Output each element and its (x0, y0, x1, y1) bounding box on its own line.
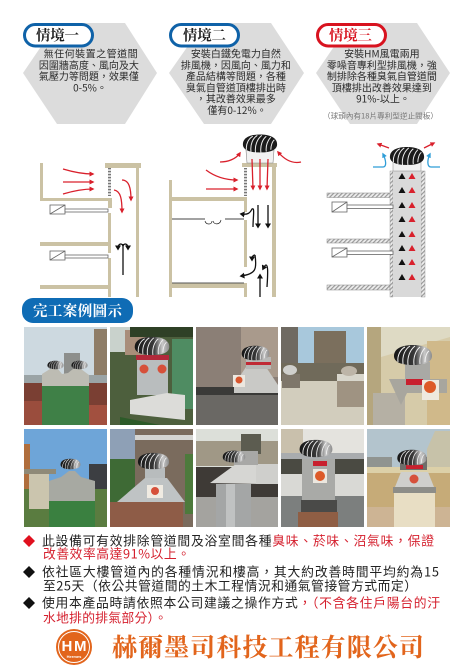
note two (23, 562, 439, 594)
logo: HM badge (56, 629, 92, 665)
shaft left wall (390, 171, 393, 297)
louver screen (244, 168, 247, 196)
description text one: 0-5%。 (73, 80, 107, 94)
ventilator head (243, 134, 277, 152)
ceiling line with fan (172, 218, 244, 220)
panel: scenario three (316, 23, 450, 124)
note two text: 依社區大樓管道內的各種情況和樓高，其大約改善時間平均約為15 (42, 562, 439, 580)
description text one: 因圍牆高度、風向及大 (39, 57, 139, 72)
description text three: 安裝HM風電兩用 (344, 46, 420, 60)
description text two: 臭氣自管道頂樓排出時 (186, 80, 286, 94)
photo: green box under blue sky (24, 429, 107, 527)
description text two: 產品結構等問題，各種 (186, 68, 286, 83)
photo: rooftop with two ventilators (281, 327, 364, 425)
bullet: red diamond (23, 535, 35, 547)
photo: white hopper and pedestal on rooftop (196, 429, 278, 527)
description text two: ，其改善效果最多 (196, 90, 276, 106)
note one (23, 530, 434, 562)
logo: HM badge: HM (62, 638, 86, 655)
note one text: 改善效率高達91%以上。 (43, 544, 190, 562)
note three (23, 592, 440, 626)
lower floor dark line (172, 282, 244, 284)
ceiling fan mark (205, 220, 221, 224)
note three text: 使用本產品時請依照本公司建議之操作方式，（不含各住戶陽台的汙 (42, 592, 440, 612)
caption: patented check valves: （球頭內有18片專利型逆止閥板） (323, 110, 438, 122)
logo: HM badge: Hermes (67, 654, 82, 659)
exhaust fans and ducts (50, 205, 108, 260)
note two text: 至25天（依公共管道間的土木工程情況和通氣管接管方式而定） (43, 576, 417, 594)
building walls (40, 163, 141, 297)
panel: scenario two (169, 23, 304, 124)
diagram: scenario three shaft (327, 143, 440, 297)
shaft interior (393, 171, 421, 297)
diagram: scenario two shaft (169, 134, 301, 297)
hexagon background two (169, 23, 304, 124)
description text one: 無任何裝置之管道間 (44, 46, 138, 60)
company name: 赫爾墨司科技工程有限公司 (112, 634, 424, 662)
red wind and down arrows (206, 152, 301, 189)
photo: hopper ventilator by concrete wall (196, 327, 278, 425)
hexagon background one (23, 23, 157, 124)
red outflow arrows (378, 143, 434, 148)
note one text: 此設備可有效排除管道間及浴室間各種臭味、菸味、沼氣味，保證 (42, 530, 434, 550)
panel: scenario one (23, 23, 157, 124)
blue inflow arrows (373, 154, 440, 167)
bullet: black diamond (23, 566, 35, 578)
photo: ventilator on hopper with brick base (110, 429, 193, 527)
black airflow arrow (118, 244, 128, 275)
section heading: completed cases: 完工案例圖示 (33, 302, 124, 320)
black airflow arrows (241, 205, 268, 297)
photo: silver cylinder with ventilator in garden (110, 327, 193, 425)
description text two: 排風機，因風向、風力和 (181, 57, 291, 72)
red wind arrows (63, 169, 131, 212)
photo: large ventilator on wall bracket (367, 327, 450, 425)
badge: scenario two: 情境二 (183, 26, 226, 44)
description text two: 安裝白鐵免電力自然 (191, 46, 281, 60)
description text three: 制排除各種臭氣自管道間 (327, 68, 437, 83)
description text three: 零噪音專利型排風機，強 (327, 57, 437, 72)
black odor triangles (398, 173, 406, 280)
ventilator neck (246, 150, 274, 163)
description text two: 僅有0-12%。 (207, 102, 267, 117)
photo: ventilator on cream pedestal (367, 429, 450, 527)
hexagon background three (316, 23, 450, 124)
description text three: 91%-以上。 (356, 90, 410, 106)
note three text: 水地排的排氣部分）。 (43, 608, 167, 626)
building walls (169, 163, 277, 297)
bullet: black diamond (23, 597, 35, 609)
description text one: 氣壓力等問題，效果僅 (39, 68, 139, 83)
louver screen (108, 168, 111, 196)
photo: cylinder ventilator on brick base (281, 429, 364, 527)
description text three: 頂樓排出改善效果達到 (332, 80, 432, 94)
badge: scenario three: 情境三 (329, 26, 372, 44)
diagram: scenario one shaft (40, 163, 141, 297)
ventilator neck (393, 162, 421, 171)
shaft right wall (421, 171, 425, 297)
section heading: completed cases (22, 298, 133, 323)
exhaust fans and ducts (332, 202, 393, 257)
red odor triangles (408, 173, 416, 280)
ventilator head (390, 147, 424, 165)
photo: green-clad shaft with two ventilators (24, 327, 107, 425)
hatched floors (327, 193, 390, 290)
badge: scenario one: 情境一 (36, 26, 80, 44)
